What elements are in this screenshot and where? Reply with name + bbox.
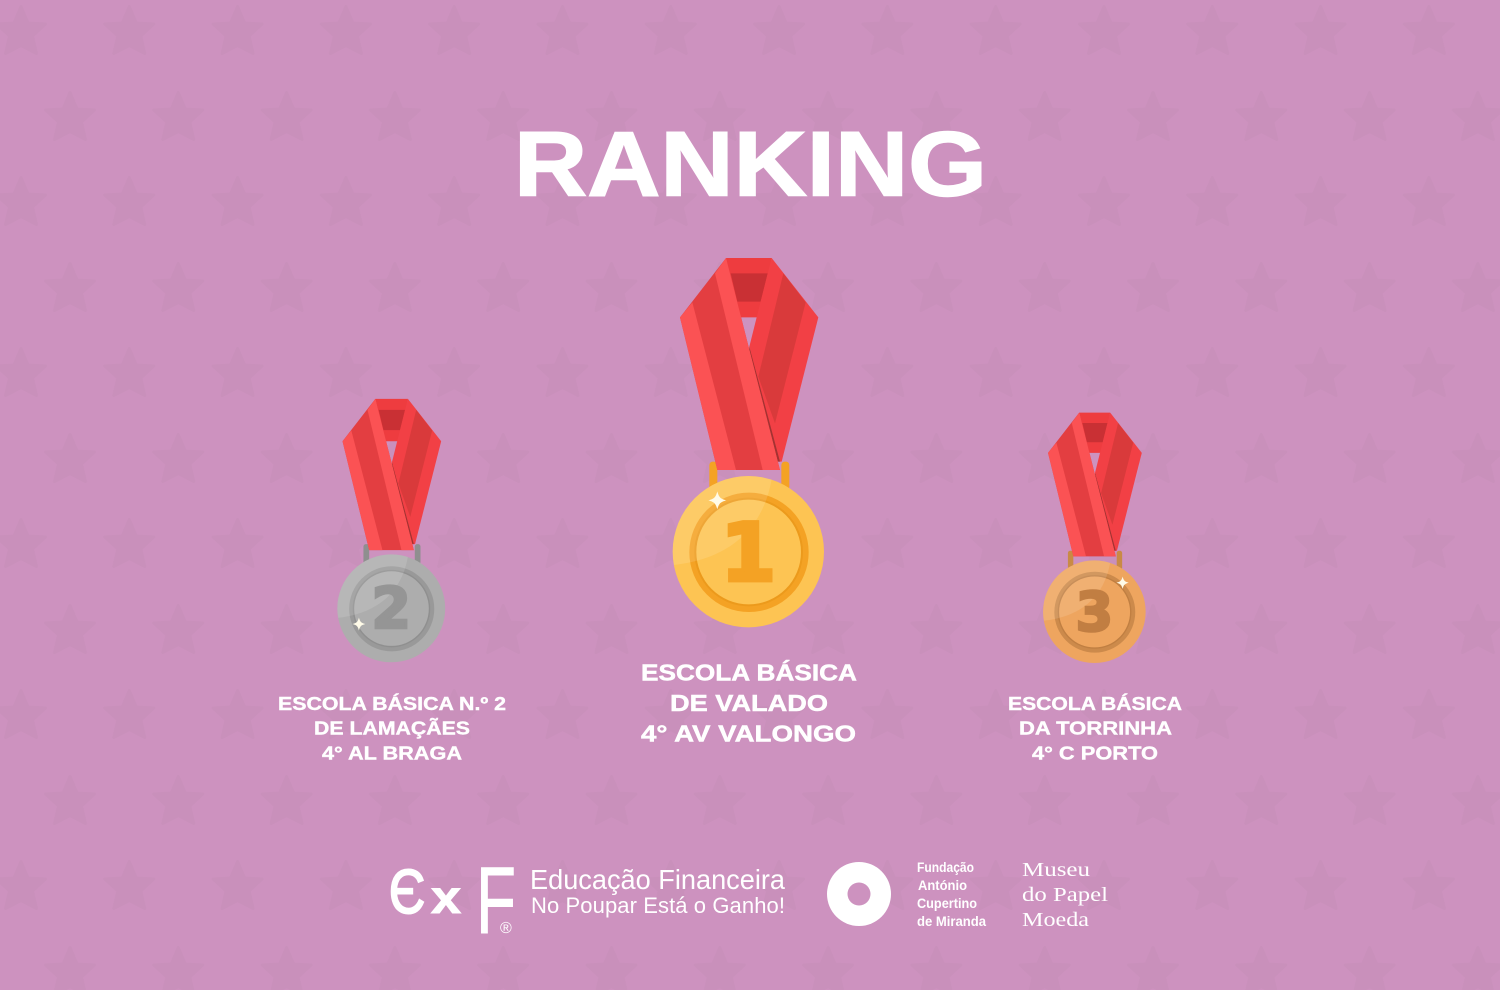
medal: first place gold <box>670 258 824 627</box>
logo: Museu do Papel Moeda: do Papel <box>1022 884 1109 906</box>
label: third place school: 4° C PORTO <box>1032 742 1158 764</box>
logo: Fundação António Cupertino de Miranda: de Miranda <box>917 913 986 929</box>
logo: Fundação António Cupertino de Miranda: António <box>918 877 967 893</box>
label: third place school <box>1008 693 1182 764</box>
medal: second place silver: 2 <box>371 576 411 642</box>
title: RANKING <box>514 114 987 216</box>
logo: Fundação António Cupertino de Miranda: Cupertino <box>917 895 977 911</box>
medal: third place bronze <box>1041 413 1146 663</box>
label: third place school: DA TORRINHA <box>1019 718 1172 738</box>
logo: Fundação António Cupertino de Miranda: Fundação <box>917 859 974 875</box>
label: third place school: ESCOLA BÁSICA <box>1008 693 1182 714</box>
logo: ExF Educação Financeira: ® <box>500 920 512 937</box>
logo: Museu do Papel Moeda: Moeda <box>1022 909 1089 931</box>
label: second place school <box>278 693 506 764</box>
label: first place school <box>641 658 857 746</box>
medal: first place gold: 1 <box>721 507 776 600</box>
logo: ExF Educação Financeira: F <box>476 848 516 954</box>
label: second place school: DE LAMAÇÃES <box>314 718 470 738</box>
label: first place school: DE VALADO <box>670 690 828 716</box>
logo: ExF Educação Financeira: Educação Financeira <box>530 864 785 895</box>
logo: Fundação António Cupertino de Miranda <box>827 859 986 929</box>
label: first place school: 4° AV VALONGO <box>641 720 856 746</box>
logo: ExF Educação Financeira: No Poupar Está o Ganho! <box>531 893 785 918</box>
medal: second place silver <box>335 399 445 662</box>
logo: ExF Educação Financeira <box>389 848 785 954</box>
logo: ExF Educação Financeira: x <box>431 871 461 923</box>
logo: Museu do Papel Moeda: Museu <box>1022 859 1090 881</box>
logo: ExF Educação Financeira: Є <box>389 858 425 927</box>
label: second place school: 4° AL BRAGA <box>322 742 462 764</box>
label: second place school: ESCOLA BÁSICA N.º 2 <box>278 693 506 714</box>
label: first place school: ESCOLA BÁSICA <box>641 658 857 686</box>
logo: Museu do Papel Moeda <box>1022 859 1109 931</box>
medal: third place bronze: 3 <box>1075 581 1113 644</box>
